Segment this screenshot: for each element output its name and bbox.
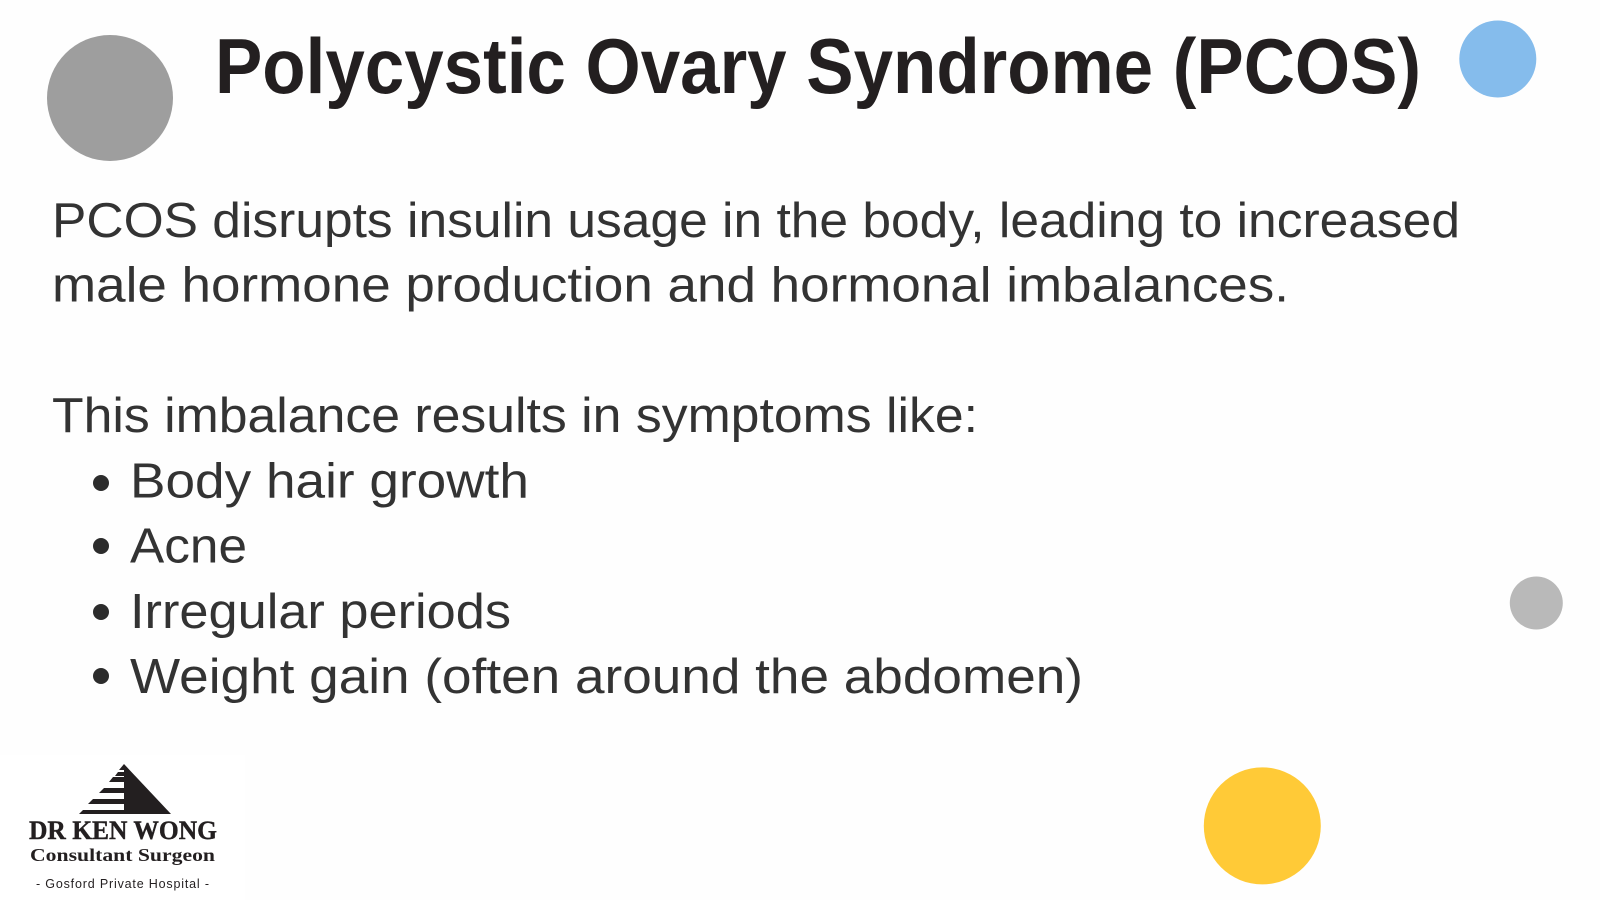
decorative circle: blue — [1459, 20, 1536, 98]
text block: symptoms lead-in: This imbalance results in symptoms like: — [52, 389, 978, 443]
list item: weight gain: Weight gain (often around the abdomen) — [130, 650, 1083, 704]
list item: acne: Acne — [130, 520, 247, 574]
icon: striped pyramid — [79, 764, 171, 814]
decorative circle: small grey — [1510, 576, 1563, 630]
list item: body hair growth: Body hair growth — [130, 454, 529, 508]
logo role: Consultant Surgeon — [30, 845, 215, 865]
title: Polycystic Ovary Syndrome (PCOS) — [215, 22, 1421, 110]
logo name: DR KEN WONG — [29, 816, 217, 845]
logo hospital: - Gosford Private Hospital - — [36, 877, 209, 891]
logo: Dr Ken Wong — [0, 755, 245, 900]
list item: irregular periods: Irregular periods — [130, 585, 511, 639]
bullet list: symptoms — [93, 454, 1083, 704]
decorative circle: large grey — [47, 35, 173, 161]
text block: intro paragraph: male hormone production and hormonal imbalances. — [52, 258, 1289, 312]
text block: intro paragraph — [52, 194, 1460, 312]
decorative circle: yellow — [1204, 767, 1321, 884]
text block: intro paragraph: PCOS disrupts insulin usage in the body, leading to increased — [52, 194, 1460, 248]
